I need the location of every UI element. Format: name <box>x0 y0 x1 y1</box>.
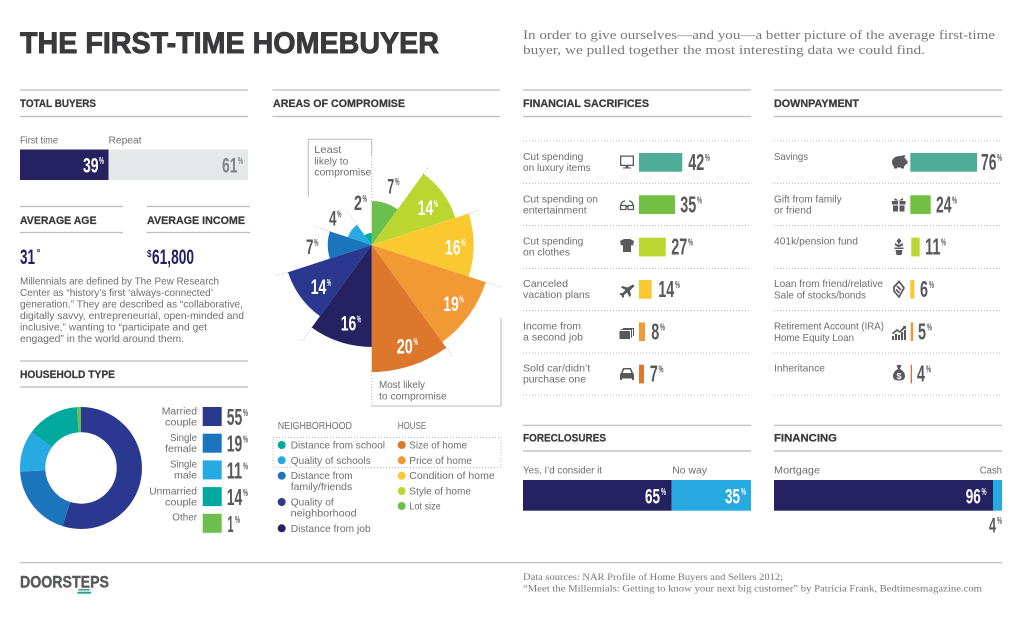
legend: house: Lot size <box>409 500 441 512</box>
row: luxury items: % <box>705 153 710 164</box>
row: inheritance: % <box>926 365 931 376</box>
row: savings <box>774 149 1002 175</box>
icon: potted plant <box>894 238 904 255</box>
data sources: “Meet the Millennials: Getting to know your next big customer” by Patricia Frank, Bedtimesmagazine.com <box>523 584 983 594</box>
row: sold car: purchase one <box>523 374 586 386</box>
panel: average age: ° <box>36 248 40 259</box>
row: 401k: 11 <box>925 234 941 260</box>
legend: household types: Single <box>170 459 197 471</box>
panel: financing: Mortgage <box>774 464 820 476</box>
legend: household types: 14 <box>227 484 242 510</box>
legend: neighborhood: Quality of <box>291 496 334 508</box>
text block: millennials description: Millennials are defined by The Pew Research <box>20 276 219 288</box>
legend: household types: 1 <box>228 511 234 537</box>
panel: average income <box>146 206 250 269</box>
row: vacation plans: 14 <box>658 276 674 302</box>
legend: neighborhood: family/friends <box>291 481 352 493</box>
pie values: % <box>395 177 400 188</box>
legend: household types: % <box>243 435 248 446</box>
pie values: 16 <box>445 236 460 259</box>
row: loan / stocks: Loan from friend/relative <box>774 278 883 290</box>
legend: household types: 19 <box>227 431 242 457</box>
text block: millennials description: engaged” in the world around them. <box>20 333 184 345</box>
legend: household types: % <box>243 461 248 472</box>
row: retirement / equity: Home Equity Loan <box>774 332 854 344</box>
callout: least likely to compromise: compromise <box>314 168 372 178</box>
icon: 3d glasses <box>620 201 634 210</box>
stacked bar: first time vs repeat: 61 <box>222 154 238 178</box>
row: clothes: Cut spending <box>523 236 583 248</box>
pie values: 14 <box>311 276 326 299</box>
icon: growth chart <box>892 326 906 340</box>
legend: household types: Unmarried <box>149 485 197 497</box>
panel: average income: $ <box>147 249 152 260</box>
stacked bar: foreclosures: % <box>741 487 746 498</box>
row: entertainment: Cut spending on <box>523 193 598 205</box>
legend: house: Condition of home <box>409 470 495 482</box>
icon: money bag <box>893 365 905 381</box>
row: retirement / equity: % <box>927 322 932 333</box>
panel: financial sacrifices: FINANCIAL SACRIFICES <box>523 98 649 110</box>
row: entertainment <box>523 191 702 217</box>
row: retirement / equity <box>774 318 932 344</box>
row: 401k: 401k/pension fund <box>774 236 858 248</box>
legend: household types <box>149 404 248 537</box>
callout: most likely to compromise: to compromise <box>379 391 447 402</box>
callout: least likely to compromise <box>308 139 372 197</box>
row: savings: % <box>997 153 1002 164</box>
panel: financing <box>774 425 1002 537</box>
row: clothes: % <box>688 238 693 249</box>
row: second job: 8 <box>651 318 659 344</box>
row: savings: Savings <box>774 151 808 163</box>
icon: cash <box>620 328 634 339</box>
row: vacation plans: vacation plans <box>523 289 590 301</box>
stacked bar: foreclosures: 65 <box>645 485 660 508</box>
icon: money bag: $ <box>896 372 902 381</box>
row: inheritance <box>774 361 931 387</box>
row: 401k <box>774 234 946 260</box>
row: luxury items: Cut spending <box>523 151 583 163</box>
legend: neighborhood: Distance from <box>291 470 353 482</box>
row: retirement / equity: 5 <box>918 318 926 344</box>
pie values: 4 <box>329 208 337 231</box>
pie values: 19 <box>443 293 459 316</box>
stacked bar: first time vs repeat: 39 <box>83 154 98 178</box>
pie values: 7 <box>306 236 314 259</box>
legend: household types: Married <box>162 406 197 418</box>
panel: average age: 31 <box>20 246 35 269</box>
legend: neighborhood: Distance from school <box>291 440 385 452</box>
row: loan / stocks <box>774 276 934 302</box>
row: sold car <box>523 361 664 387</box>
pie values: % <box>461 238 466 249</box>
legend: neighborhood: NEIGHBORHOOD <box>278 421 352 432</box>
legend: neighborhood: Quality of schools <box>291 455 371 467</box>
data sources: Data sources: NAR Profile of Home Buyers and Sellers 2012; <box>523 572 783 583</box>
text block: millennials description: generation.” They are described as “collaborative, <box>20 298 243 310</box>
legend: household types: female <box>165 443 197 455</box>
pie values: % <box>337 210 342 220</box>
text block: millennials description <box>20 276 244 345</box>
row: inheritance: Inheritance <box>774 362 825 374</box>
donut chart <box>33 420 129 516</box>
row: savings: 76 <box>981 149 996 175</box>
legend: house: Price of home <box>409 455 472 467</box>
row: gift <box>774 191 957 217</box>
text block: millennials description: digitally savvy, entrepreneurial, open-minded and <box>20 310 244 322</box>
panel: foreclosures: No way <box>672 464 708 476</box>
row: clothes: on clothes <box>523 247 570 259</box>
row: entertainment: entertainment <box>523 204 587 216</box>
pie values <box>306 175 466 358</box>
row: vacation plans: Canceled <box>523 278 568 290</box>
intro text <box>523 27 995 57</box>
row: sold car: Sold car/didn’t <box>523 362 590 374</box>
panel: household type <box>20 361 248 537</box>
pie values: 16 <box>341 313 356 336</box>
panel: average income: 61,800 <box>152 246 194 269</box>
row: gift: or friend <box>774 204 812 216</box>
row: luxury items: on luxury items <box>523 162 591 174</box>
legend: household types: couple <box>165 416 197 428</box>
row: luxury items <box>523 149 710 175</box>
pie values: % <box>414 337 418 348</box>
legend: household types: Single <box>170 432 197 444</box>
logo: doorsteps: DOORSTEPS <box>20 573 109 592</box>
legend: house: Style of home <box>409 486 471 498</box>
row: second job: Income from <box>523 320 581 332</box>
row: vacation plans: % <box>675 280 680 291</box>
row: loan / stocks: Sale of stocks/bonds <box>774 290 866 302</box>
heading: total buyers: TOTAL BUYERS <box>20 98 96 110</box>
legend: house: Size of home <box>409 440 467 452</box>
stacked bar: first time vs repeat: % <box>99 156 104 167</box>
title: THE FIRST-TIME HOMEBUYER <box>20 27 439 60</box>
data sources <box>523 572 983 594</box>
bar labels <box>20 134 142 146</box>
pie values: % <box>357 314 361 326</box>
pie values: 14 <box>418 197 433 220</box>
row: second job: % <box>660 322 665 333</box>
stacked bar: financing: % <box>982 487 987 498</box>
row: clothes <box>523 234 693 260</box>
row: entertainment: 35 <box>680 191 696 217</box>
row: vacation plans <box>523 276 680 302</box>
stacked bar: foreclosures: 35 <box>725 485 740 508</box>
pie values: 7 <box>387 175 394 198</box>
callout: most likely to compromise <box>372 318 501 406</box>
callout: most likely to compromise: Most likely <box>379 380 425 391</box>
legend: house: HOUSE <box>398 421 426 432</box>
row: gift: Gift from family <box>774 193 842 205</box>
panel: areas of compromise <box>272 90 502 535</box>
row: second job: a second job <box>523 332 583 344</box>
stacked bar: financing: 96 <box>966 485 981 508</box>
panel: downpayment <box>774 90 1002 395</box>
legend: household types: 11 <box>227 457 242 483</box>
stacked bar: financing <box>774 480 1002 537</box>
text block: millennials description: inclusive,” wanting to “participate and get <box>20 322 207 334</box>
icon: car <box>620 368 634 380</box>
row: sold car: 7 <box>650 361 658 387</box>
stacked bar: foreclosures: % <box>661 487 666 498</box>
stacked bar: financing: % <box>997 516 1002 527</box>
panel: household type: HOUSEHOLD TYPE <box>20 369 115 381</box>
panel: financing: FINANCING <box>774 433 837 445</box>
row: gift: % <box>952 195 957 206</box>
pie values: 2 <box>354 192 362 215</box>
legend: household types: % <box>243 408 248 419</box>
panel: average age: AVERAGE AGE <box>20 215 96 227</box>
pie values: % <box>459 294 464 306</box>
legend: household types: couple <box>165 496 197 508</box>
legend: household types: male <box>174 470 197 482</box>
row: loan / stocks: % <box>929 280 934 291</box>
legend: neighborhood <box>273 421 501 535</box>
legend: household types: % <box>243 488 248 499</box>
stacked bar: first time vs repeat <box>20 150 248 180</box>
callout: least likely to compromise: likely to <box>314 156 349 168</box>
panel: foreclosures: FORECLOSURES <box>523 433 606 445</box>
bar labels: Repeat <box>108 134 142 146</box>
text block: millennials description: Center as “history’s first ‘always-connected’ <box>20 287 213 299</box>
legend: household types: % <box>235 515 240 526</box>
row: loan / stocks: 6 <box>920 276 928 302</box>
pie values: % <box>327 278 331 289</box>
panel: average income: AVERAGE INCOME <box>147 215 245 227</box>
intro text: buyer, we pulled together the most interesting data we could find. <box>523 42 925 57</box>
pie values: 20 <box>397 335 413 358</box>
intro text: In order to give ourselves—and you—a better picture of the average first-time <box>523 27 995 42</box>
icon: t-shirt <box>620 239 634 252</box>
row: sold car: % <box>658 365 664 376</box>
icon: television <box>620 156 634 168</box>
callout: least likely to compromise: Least <box>314 145 342 156</box>
panel: foreclosures: Yes, I’d consider it <box>523 464 602 476</box>
icon: airplane <box>620 284 634 298</box>
legend: neighborhood: neighborhood <box>291 508 357 520</box>
panel: areas of compromise: AREAS OF COMPROMISE <box>273 98 405 110</box>
row: second job <box>523 318 665 344</box>
row: entertainment: % <box>697 195 702 206</box>
panel: average age <box>20 206 123 269</box>
panel: financing: Cash <box>980 464 1002 476</box>
row: inheritance: 4 <box>917 361 925 387</box>
pie values: % <box>314 238 319 249</box>
pie values: % <box>434 199 438 210</box>
row: clothes: 27 <box>671 234 687 260</box>
icon: gift box <box>892 198 906 212</box>
bar labels: First time <box>20 134 58 146</box>
stacked bar: first time vs repeat: % <box>238 156 243 167</box>
icon: piggy bank <box>892 155 908 168</box>
stacked bar: financing: 4 <box>989 514 996 537</box>
polar pie chart <box>274 155 502 406</box>
panel: total buyers <box>20 90 248 180</box>
stacked bar: foreclosures <box>523 480 751 511</box>
legend: neighborhood: Distance from job <box>291 523 371 535</box>
panel: foreclosures <box>523 425 751 511</box>
legend: household types: 55 <box>227 404 242 430</box>
icon: rolled document <box>894 282 904 297</box>
row: retirement / equity: Retirement Account (IRA) <box>774 320 884 332</box>
legend: household types: Other <box>172 512 197 524</box>
pie values: % <box>362 194 367 205</box>
row: luxury items: 42 <box>688 149 704 175</box>
panel: downpayment: DOWNPAYMENT <box>774 98 859 110</box>
row: gift: 24 <box>936 191 952 217</box>
legend: house <box>398 421 495 512</box>
panel: financial sacrifices <box>523 90 751 395</box>
row: 401k: % <box>941 238 946 249</box>
